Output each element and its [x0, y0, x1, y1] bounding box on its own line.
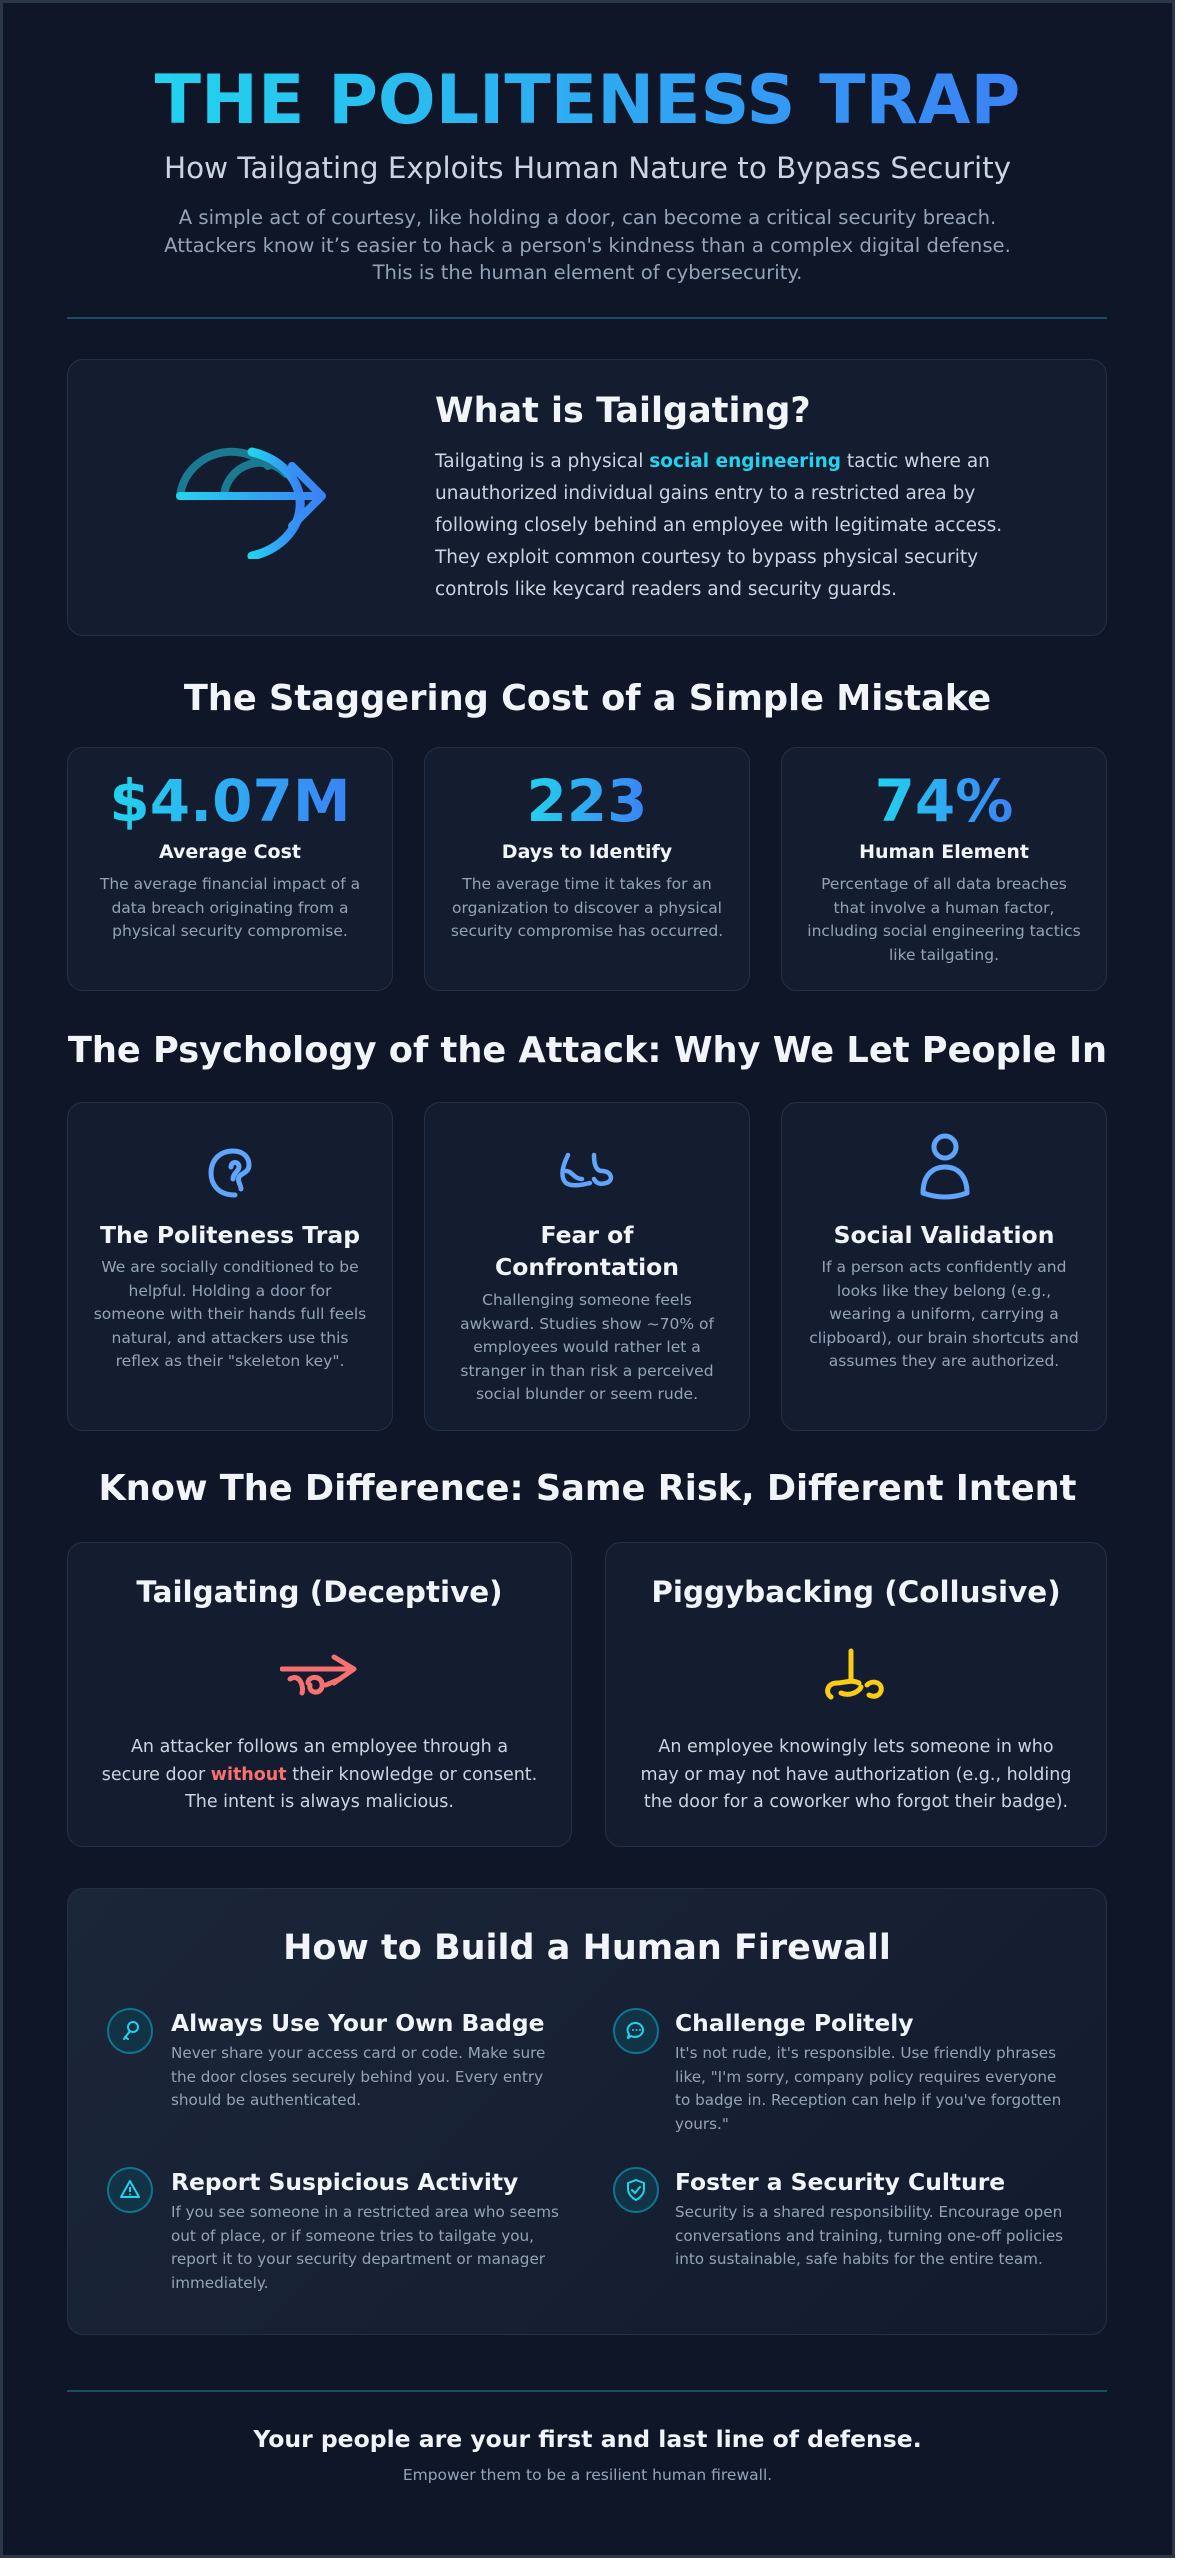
panel: stat average cost	[67, 747, 393, 991]
icon: person	[920, 1134, 970, 1200]
title: THE POLITENESS TRAP	[155, 61, 1020, 140]
icon: yellow handshake	[825, 1648, 884, 1700]
icon: shield	[613, 2167, 659, 2213]
intro text: This is the human element of cybersecurity.	[373, 261, 802, 284]
panel: stat average cost: The average financial impact of a data breach originating from a physical security compromise.	[100, 875, 360, 940]
panel: tailgating deceptive: Tailgating (Deceptive)	[136, 1575, 503, 1609]
panel: social validation: If a person acts confidently and looks like they belong (e.g., wearing a uniform, carrying a clipboard), our brain shortcuts and assumes they are authorized.	[809, 1258, 1079, 1370]
panel: tailgating deceptive	[67, 1542, 572, 1847]
intro text: Attackers know it’s easier to hack a person's kindness than a complex digital defense.	[164, 234, 1011, 256]
item: report suspicious activity: Report Suspicious Activity	[171, 2168, 518, 2196]
icon: chat	[613, 2008, 659, 2054]
panel: stat human element: 74%	[875, 767, 1013, 835]
panel: stat human element: Percentage of all data breaches that involve a human factor, including social engineering tactics like tailgating.	[807, 875, 1081, 964]
item: report suspicious activity	[107, 2167, 559, 2292]
item: report suspicious activity: If you see someone in a restricted area who seems out of place, or if someone tries to tailgate you, report it to your security department or manager immediately.	[171, 2203, 559, 2292]
panel: social validation: Social Validation	[834, 1221, 1054, 1249]
icon: warning	[107, 2167, 153, 2213]
item: challenge politely: It's not rude, it's responsible. Use friendly phrases like, "I'm sorry, company policy requires everyone to badge in. Reception can help if you've forgotten yours."	[675, 2044, 1061, 2132]
panel: stat days: Days to Identify	[502, 841, 672, 863]
icon: red arrow	[280, 1654, 356, 1696]
intro text: A simple act of courtesy, like holding a door, can become a critical security breach.	[179, 206, 996, 229]
panel: social validation	[781, 1102, 1107, 1431]
panel: human firewall: How to Build a Human Firewall	[283, 1928, 891, 1968]
item: challenge politely	[613, 2008, 1061, 2132]
panel: politeness trap: We are socially conditioned to be helpful. Holding a door for someone with their hands full feels natural, and attackers use this reflex as their "skeleton key".	[94, 1258, 366, 1370]
panel: stat average cost: $4.07M	[109, 767, 351, 835]
panel: politeness trap: The Politeness Trap	[100, 1221, 360, 1249]
icon: ear	[208, 1148, 252, 1198]
subtitle: How Tailgating Exploits Human Nature to Bypass Security	[164, 151, 1011, 185]
icon: tailgating arrow	[176, 448, 326, 559]
panel: piggybacking collusive	[605, 1542, 1107, 1847]
panel: fear of confrontation: Confrontation	[495, 1253, 679, 1281]
panel: stat days	[424, 747, 750, 991]
item: own badge	[107, 2008, 545, 2109]
panel: fear of confrontation	[424, 1102, 750, 1431]
panel: stat human element	[781, 747, 1107, 991]
heading: What is Tailgating?	[435, 391, 811, 431]
item: own badge: Always Use Your Own Badge	[171, 2009, 544, 2037]
item: own badge: Never share your access card or code. Make sure the door closes securely behind you. Every entry should be authenticated.	[171, 2044, 545, 2109]
panel: tailgating deceptive: An attacker follows an employee through a secure door without their knowledge or consent. The intent is always malicious.	[102, 1737, 537, 1812]
intro text	[164, 206, 1011, 284]
icon: key	[107, 2008, 153, 2054]
item: security culture	[613, 2167, 1063, 2268]
panel: politeness trap	[67, 1102, 393, 1431]
heading: psychology: The Psychology of the Attack: Why We Let People In	[68, 1030, 1107, 1071]
panel: stat average cost: Average Cost	[159, 841, 301, 863]
panel: what is tailgating	[67, 359, 1107, 636]
panel: fear of confrontation: Fear of	[540, 1221, 634, 1249]
panel: piggybacking collusive: An employee knowingly lets someone in who may or may not have authorization (e.g., holding the door for a coworker who forgot their badge).	[641, 1737, 1071, 1812]
heading: cost: The Staggering Cost of a Simple Mistake	[184, 678, 991, 719]
panel: piggybacking collusive: Piggybacking (Collusive)	[651, 1575, 1061, 1609]
heading: know the difference: Know The Difference: Same Risk, Different Intent	[98, 1468, 1077, 1509]
panel: human firewall	[67, 1888, 1107, 2335]
panel: stat human element: Human Element	[859, 841, 1029, 863]
item: security culture: Foster a Security Culture	[675, 2168, 1005, 2196]
panel: stat days: 223	[526, 767, 648, 835]
text block: Tailgating is a physical social engineering tactic where an unauthorized individual gains entry to a restricted area by following closely behind an employee with legitimate access. They exploit common courtesy to bypass physical security controls like keycard readers and security guards.	[435, 451, 1002, 600]
item: security culture: Security is a shared responsibility. Encourage open conversations and training, turning one-off policies into sustainable, safe habits for the entire team.	[675, 2203, 1063, 2268]
item: challenge politely: Challenge Politely	[675, 2009, 913, 2037]
panel: fear of confrontation: Challenging someone feels awkward. Studies show ~70% of employees would rather let a stranger in than risk a perceived social blunder or seem rude.	[460, 1291, 714, 1403]
footer tagline: Your people are your first and last line of defense.	[253, 2425, 922, 2453]
icon: handshake	[560, 1152, 614, 1188]
panel: stat days: The average time it takes for an organization to discover a physical security compromise has occurred.	[451, 875, 723, 940]
footer subtext: Empower them to be a resilient human firewall.	[403, 2466, 772, 2484]
